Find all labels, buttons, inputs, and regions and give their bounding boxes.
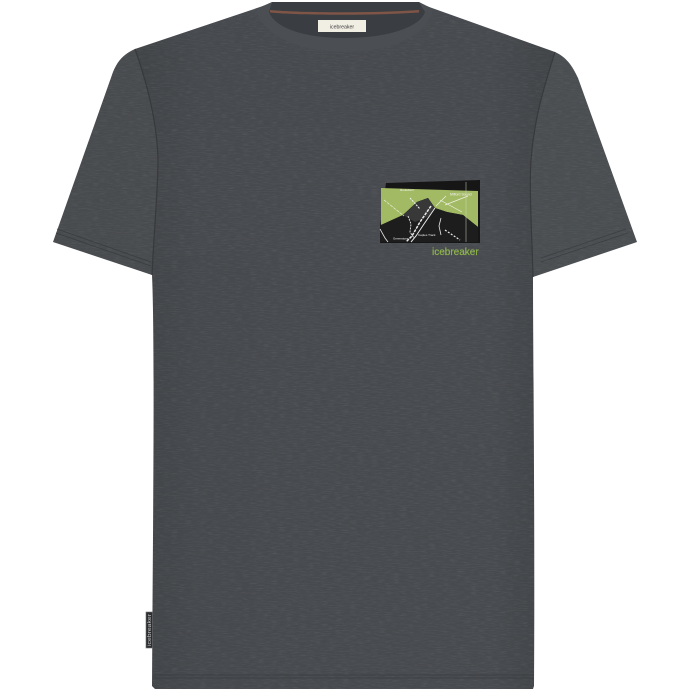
- inside back neck: [269, 2, 425, 38]
- neck label: [318, 20, 366, 32]
- black print backing: [380, 180, 480, 243]
- left sleeve: [53, 49, 158, 275]
- map labels: Milford Sound: [450, 192, 472, 196]
- neck label: icebreaker: [330, 24, 354, 30]
- mountain shading: [403, 198, 435, 222]
- dark mountain: [380, 198, 478, 242]
- print wordmark: icebreaker: [432, 247, 479, 258]
- shirt body: [135, 3, 555, 689]
- side seam tag: [146, 612, 153, 648]
- green sky: [381, 188, 478, 227]
- garment seams: [56, 49, 628, 678]
- neck tape: [270, 10, 419, 15]
- right sleeve: [530, 52, 637, 277]
- chest print: Routeburn: [400, 188, 414, 192]
- collar: [256, 2, 433, 52]
- chest print: [380, 180, 480, 258]
- collar rib: [256, 2, 433, 52]
- chest print: Greenstone: [393, 236, 409, 240]
- chest print: Caples Track: [418, 233, 436, 237]
- side seam tag: icebreaker: [147, 614, 153, 646]
- map routes: [380, 182, 468, 242]
